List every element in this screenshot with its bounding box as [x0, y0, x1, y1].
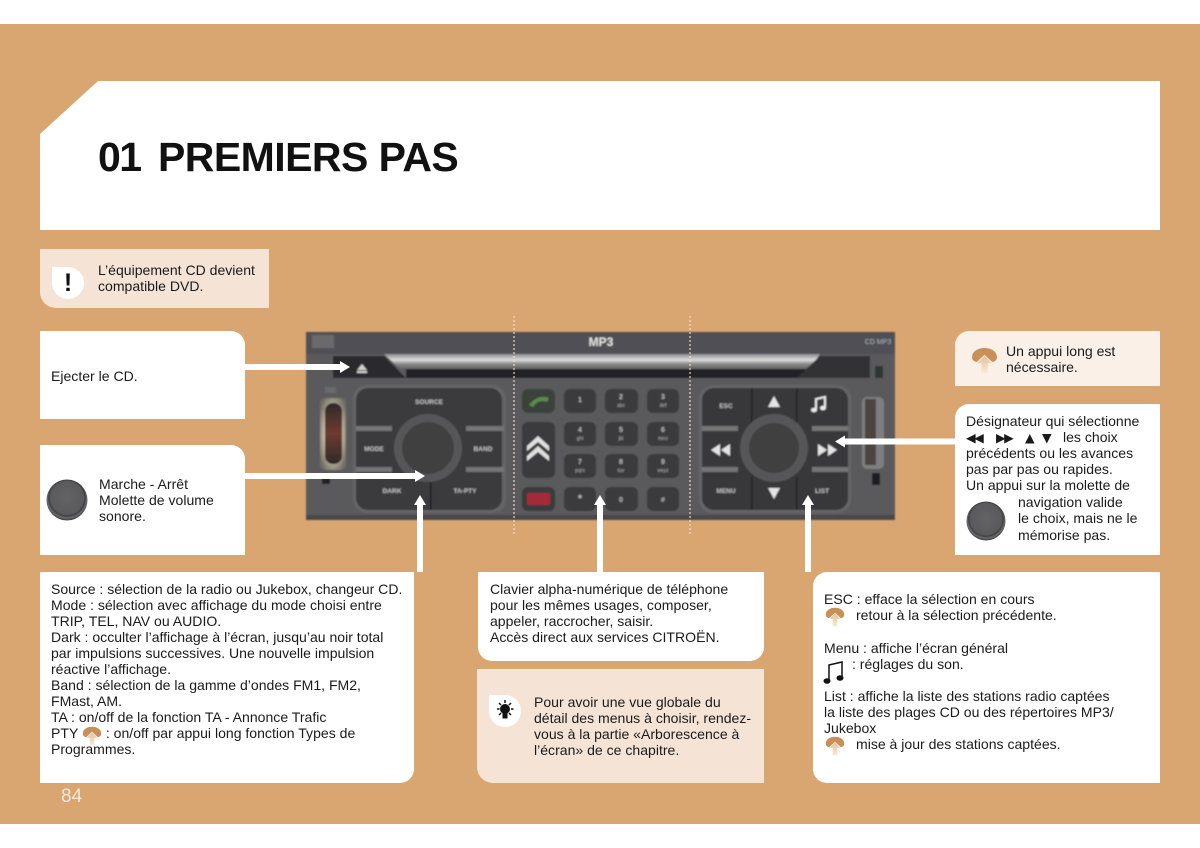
phone keypad: tuv: [618, 468, 625, 474]
right controls text: List : affiche la liste des stations radio captées: [824, 688, 1110, 704]
panel: long press note: [955, 331, 1160, 386]
arrow: navigation selector: [835, 436, 955, 448]
panel: eject: [40, 331, 245, 419]
selector text: précédents ou les avances: [966, 445, 1133, 461]
selector text: ▲: [1025, 430, 1033, 445]
long press text: nécessaire.: [1006, 359, 1078, 375]
icon: volume knob: [46, 480, 88, 520]
keypad text: [490, 581, 728, 645]
icon: exclamation mark: [52, 267, 84, 299]
selector text: Un appui sur la molette de: [966, 477, 1130, 493]
power and volume text: Marche - Arrêt: [99, 476, 188, 492]
right control cluster: [699, 385, 851, 513]
source functions text: Source : sélection de la radio ou Jukebox, changeur CD.: [51, 581, 402, 597]
source functions text: Dark : occulter l’affichage à l’écran, jusqu’au noir total: [51, 629, 383, 645]
selector text: navigation valide: [1018, 494, 1123, 510]
phone keypad: pqrs: [575, 468, 585, 474]
selector text: [966, 413, 1139, 543]
left control cluster: [353, 385, 506, 513]
right controls text: Menu : affiche l’écran général: [824, 640, 1008, 656]
long press text: [1006, 343, 1116, 375]
panel: warning note: [40, 249, 269, 308]
arrow: source controls: [414, 495, 426, 572]
long press text: Un appui long est: [1006, 343, 1115, 359]
right control cluster: MENU: [716, 488, 736, 495]
right controls text: ESC : efface la sélection en cours: [824, 591, 1035, 607]
power and volume text: sonore.: [99, 508, 146, 524]
panel: source functions: [40, 572, 414, 783]
phone keypad: 4: [578, 427, 582, 434]
source functions text: Band : sélection de la gamme d’ondes FM1, FM2,: [51, 677, 361, 693]
icon: long press: [82, 726, 102, 746]
fold lines: [514, 316, 690, 536]
source functions text: réactive l’affichage.: [51, 661, 171, 677]
power and volume text: Molette de volume: [99, 492, 214, 508]
source functions text: FMast, AM.: [51, 693, 122, 709]
eject text: Ejecter le CD.: [51, 368, 138, 384]
arrow: list controls: [802, 495, 814, 572]
icon: exclamation mark: !: [64, 269, 72, 297]
right controls text: Jukebox: [824, 720, 876, 736]
icon: long press: [826, 608, 844, 626]
right control cluster: ESC: [719, 403, 733, 410]
brand marks: CD MP3: [865, 339, 891, 346]
right control cluster: LIST: [815, 488, 829, 495]
selector text: le choix, mais ne le: [1018, 510, 1137, 526]
arrow: eject: [245, 361, 350, 373]
phone keypad: *: [578, 493, 583, 505]
MP3 label: MP3: [589, 335, 614, 349]
panel: power and volume: [40, 445, 245, 555]
left control cluster: SOURCE: [415, 399, 444, 406]
panel: navigation selector: [955, 404, 1160, 555]
keypad text: Clavier alpha-numérique de téléphone: [490, 581, 728, 597]
phone keypad: #: [661, 497, 665, 504]
right controls text: la liste des plages CD ou des répertoires MP3/: [824, 704, 1114, 720]
selector text: pas par pas ou rapides.: [966, 461, 1113, 477]
phone keypad: [522, 389, 679, 511]
phone keypad: 0: [619, 497, 623, 504]
phone keypad: 7: [578, 459, 582, 466]
power and volume text: [99, 476, 214, 524]
selector text: ◀◀: [966, 430, 982, 445]
source functions text: Mode : sélection avec affichage du mode choisi entre: [51, 597, 382, 613]
keypad text: Accès direct aux services CITROËN.: [490, 629, 720, 645]
phone keypad: wxyz: [657, 468, 669, 474]
selector text: ▶▶: [996, 430, 1012, 445]
phone keypad: ghi: [577, 436, 583, 442]
panel: right-hand controls: [813, 572, 1160, 783]
left control cluster: TA-PTY: [454, 488, 477, 495]
keypad text: pour les mêmes usages, composer,: [490, 597, 712, 613]
right controls text: mise à jour des stations captées.: [856, 736, 1061, 752]
icon: light bulb: [489, 695, 521, 727]
title: 01: [98, 134, 141, 180]
selector text: mémorise pas.: [1018, 527, 1110, 543]
warning text: compatible DVD.: [98, 278, 203, 294]
right controls text: : réglages du son.: [852, 656, 964, 672]
icon: long press: [826, 736, 844, 756]
left control cluster: MODE: [364, 446, 384, 453]
left control cluster: DARK: [383, 488, 402, 495]
title banner: PREMIERS PAS: [158, 134, 458, 180]
title banner: [40, 81, 1160, 230]
phone keypad: 3: [661, 394, 665, 401]
phone keypad: mno: [658, 436, 668, 442]
arrow: keypad: [594, 495, 606, 572]
panel: phone keypad: [478, 572, 764, 661]
CD slot: [333, 354, 883, 378]
tip text: [534, 694, 751, 758]
icon: navigation knob: [966, 502, 1006, 540]
icon: music note: [824, 661, 844, 684]
panel: tip: [477, 669, 764, 783]
selector text: ▼: [1042, 430, 1050, 445]
phone keypad: 5: [619, 427, 623, 434]
source functions text: par impulsions successives. Une nouvelle impulsion: [51, 645, 374, 661]
eject button: [357, 364, 367, 373]
source functions text: [51, 581, 402, 757]
tip text: détail des menus à choisir, rendez-: [534, 710, 751, 726]
phone keypad: 8: [619, 459, 623, 466]
selector text: les choix: [1063, 429, 1118, 445]
phone keypad: 6: [661, 427, 665, 434]
phone keypad: 2: [619, 394, 623, 401]
right controls text: [824, 591, 1114, 752]
source functions text: TRIP, TEL, NAV ou AUDIO.: [51, 613, 221, 629]
page number: 84: [61, 786, 82, 807]
phone keypad: def: [660, 403, 667, 409]
source functions text: Programmes.: [51, 741, 135, 757]
phone keypad: 1: [578, 397, 582, 404]
tip text: Pour avoir une vue globale du: [534, 694, 721, 710]
CD/DVD side slot: [862, 397, 884, 485]
right controls text: retour à la sélection précédente.: [856, 607, 1057, 623]
tip text: l’écran» de ce chapitre.: [534, 742, 679, 758]
phone keypad: 9: [661, 459, 665, 466]
left control cluster: BAND: [474, 446, 493, 453]
source functions text: TA : on/off de la fonction TA - Annonce Trafic: [51, 709, 326, 725]
arrow: volume knob: [245, 470, 425, 482]
phone keypad: abc: [617, 403, 626, 409]
power button: [320, 387, 346, 484]
car radio: [306, 332, 895, 520]
tip text: vous à la partie «Arborescence à: [534, 726, 739, 742]
warning text: L’équipement CD devient: [98, 262, 255, 278]
source functions text: PTY : on/off par appui long fonction Types de: [51, 725, 355, 741]
title: [100, 142, 458, 172]
phone keypad: jkl: [618, 436, 623, 442]
icon: long press: [972, 348, 997, 373]
keypad text: appeler, raccrocher, saisir.: [490, 613, 653, 629]
selector text: Désignateur qui sélectionne: [966, 413, 1139, 429]
warning text: [98, 262, 255, 294]
